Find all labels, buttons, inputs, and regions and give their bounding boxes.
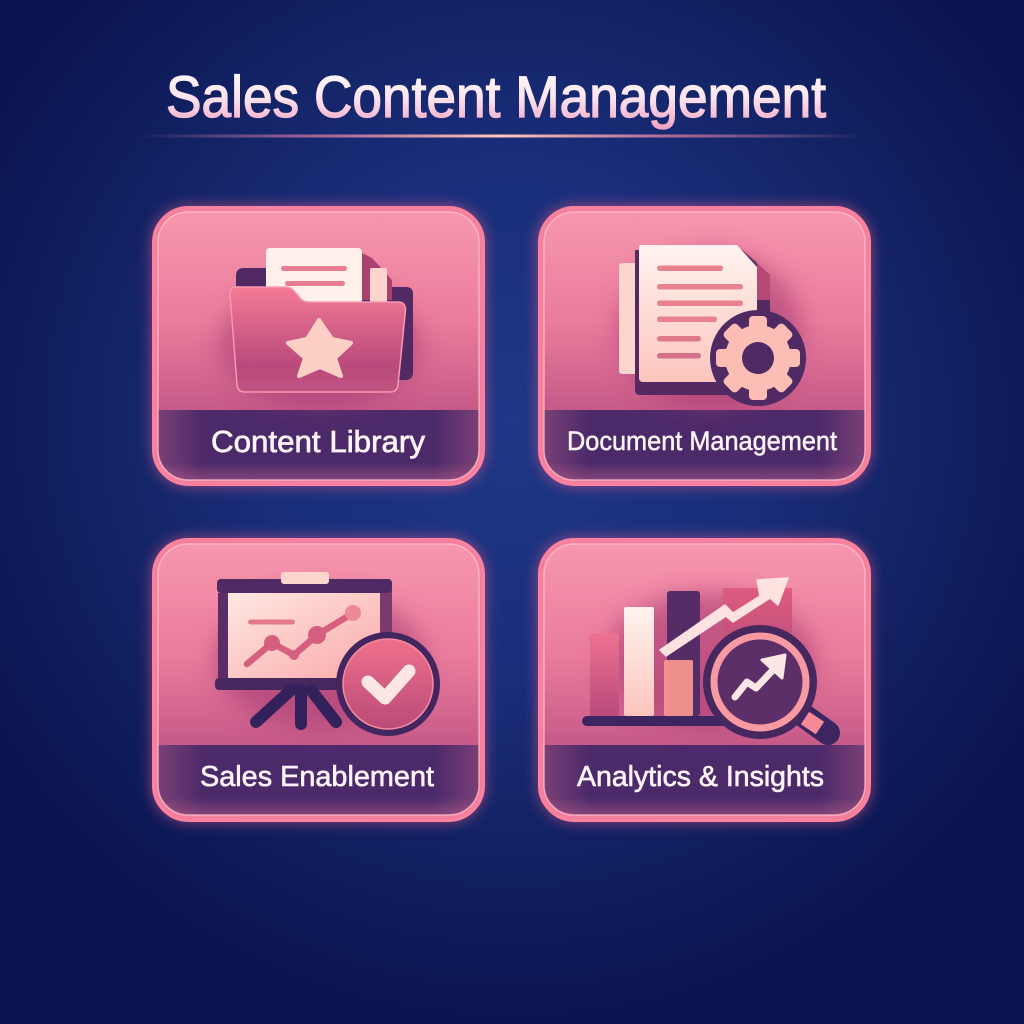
arrow: rising trend bbox=[660, 578, 788, 656]
label: document management: Document Management bbox=[567, 426, 837, 456]
title underline bbox=[140, 134, 862, 138]
title: Sales Content Management bbox=[166, 65, 826, 130]
icon: folder with star bbox=[220, 248, 420, 407]
chart line on board bbox=[247, 605, 361, 664]
panel: document management bbox=[538, 206, 871, 486]
label: content library: Content Library bbox=[211, 424, 425, 459]
icon: presentation board with check bbox=[215, 572, 440, 736]
panel: content library bbox=[152, 206, 485, 486]
bar chart bbox=[582, 588, 792, 726]
label: analytics and insights: Analytics & Insights bbox=[577, 761, 824, 793]
icon: magnifier bbox=[703, 625, 828, 739]
panel: analytics and insights bbox=[538, 538, 871, 822]
icon: check badge bbox=[336, 632, 440, 736]
panel: sales enablement bbox=[152, 538, 485, 822]
icon: documents with gear bbox=[618, 245, 806, 408]
icon: bar chart with magnifier bbox=[582, 578, 828, 739]
icon: easel legs bbox=[256, 690, 336, 724]
label: sales enablement: Sales Enablement bbox=[200, 761, 434, 793]
icon: gear bbox=[716, 316, 800, 400]
